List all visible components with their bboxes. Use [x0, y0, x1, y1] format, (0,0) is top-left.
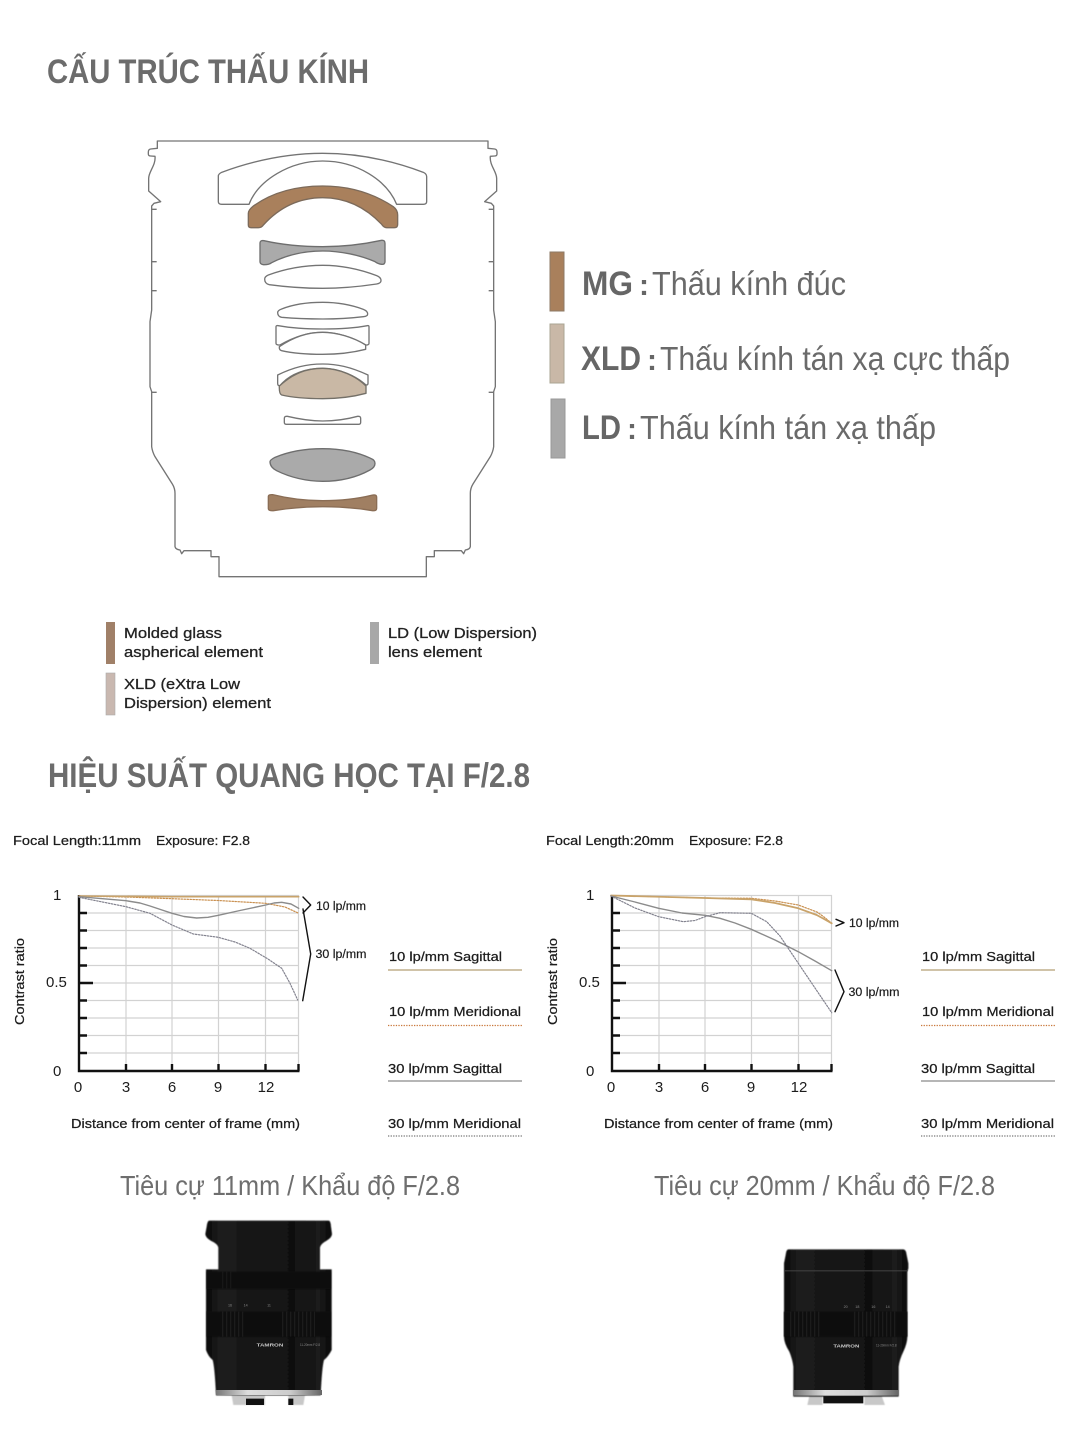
swatch LD element [370, 622, 379, 664]
zoom scale [844, 1305, 890, 1309]
chart spec line [546, 833, 783, 848]
key: 30 meridional [921, 1116, 1055, 1136]
label LD: Thấu kính tán xạ thấp [640, 409, 936, 446]
brace: 30 lp/mm [303, 909, 366, 1001]
mount [232, 1395, 305, 1405]
axes and ticks [79, 895, 300, 1071]
front ring highlight [785, 1270, 908, 1271]
key: 10 sagittal: 10 lp/mm Sagittal [389, 949, 502, 964]
curve: 10 lp/mm meridional [79, 896, 299, 913]
x axis values: 6 [701, 1079, 709, 1096]
x axis values: 9 [747, 1079, 755, 1096]
heading: optical performance: HIỆU SUẤT QUANG HỌC TẠI F/2.8 [48, 757, 530, 795]
label LD element: lens element [388, 644, 483, 661]
silver bayonet ring [794, 1390, 898, 1396]
key: 10 sagittal: 10 lp/mm Sagittal [922, 949, 1035, 964]
grid [612, 895, 832, 1070]
x axis values: 12 [791, 1079, 807, 1096]
front barrel and body [205, 1221, 332, 1395]
curve: 30 lp/mm sagittal [611, 896, 832, 971]
lens photo: retracted at 20mm [784, 1249, 908, 1405]
grid [79, 895, 299, 1070]
key: 30 meridional: 30 lp/mm Meridional [921, 1116, 1054, 1131]
lens element 10 [284, 416, 361, 424]
brace: 30 lp/mm: 30 lp/mm [848, 987, 900, 999]
zoom scale: 11 [267, 1304, 271, 1308]
curve: 30 lp/mm meridional [79, 897, 298, 1000]
brand text: TAMRON [257, 1342, 284, 1348]
y axis values: 0.5 [46, 974, 67, 991]
swatch MG [550, 252, 564, 311]
body [784, 1249, 908, 1397]
key: 10 sagittal [921, 949, 1055, 970]
y axis values: 0.5 [579, 974, 600, 991]
label LD element [388, 625, 537, 661]
lens element 11: LD [270, 449, 375, 481]
x axis values [607, 1079, 807, 1096]
chart spec line [13, 833, 250, 848]
x axis values: 3 [122, 1079, 130, 1096]
label MG: Thấu kính đúc [652, 265, 846, 302]
x axis values: 0 [74, 1079, 82, 1096]
lens element 4 [265, 265, 381, 288]
mount [807, 1396, 885, 1405]
swatch molded glass [106, 622, 115, 664]
label MG: MG [582, 265, 633, 303]
label LD element: LD (Low Dispersion) [388, 625, 537, 642]
x axis values: 12 [258, 1079, 274, 1096]
lens element 12: molded glass [268, 495, 377, 511]
key: 10 meridional [388, 1004, 522, 1026]
grip rings [207, 1272, 331, 1289]
label MG: : [639, 269, 649, 302]
lens element 1 [218, 153, 427, 204]
x axis values: 9 [214, 1079, 222, 1096]
silver bayonet ring [216, 1390, 322, 1395]
zoom scale: 16 [871, 1305, 875, 1309]
key: 30 meridional [388, 1116, 522, 1136]
key: 10 meridional: 10 lp/mm Meridional [922, 1004, 1054, 1019]
label XLD: XLD [581, 340, 641, 378]
lens element 3: LD [260, 240, 385, 265]
caption: 20mm: Tiêu cự 20mm / Khẩu độ F/2.8 [654, 1170, 995, 1201]
key: 10 sagittal [388, 949, 522, 970]
barrel outline [148, 141, 497, 577]
line key [921, 949, 1055, 1136]
key: 10 meridional: 10 lp/mm Meridional [389, 1004, 521, 1019]
legend: Vietnamese lens types [550, 252, 1010, 458]
key: 30 meridional: 30 lp/mm Meridional [388, 1116, 521, 1131]
y axis values: 1 [53, 887, 61, 904]
zoom scale: 18 [855, 1305, 859, 1309]
brace: 10 lp/mm: 10 lp/mm [316, 901, 366, 913]
y axis values: 1 [586, 887, 594, 904]
swatch XLD [550, 324, 564, 383]
axes and ticks [612, 895, 832, 1071]
brace: 10 lp/mm [303, 897, 366, 913]
label LD: : [627, 413, 637, 446]
line key [388, 949, 522, 1136]
chart spec line: Focal Length:11mm [13, 833, 141, 848]
y axis values [579, 887, 600, 1080]
x axis title: Distance from center of frame (mm) [604, 1116, 833, 1131]
curve: 30 lp/mm sagittal [79, 897, 299, 918]
brand text: TAMRON [833, 1343, 860, 1349]
lens element 6 [276, 326, 369, 345]
zoom scale: 16 [228, 1304, 232, 1308]
lens construction diagram [148, 141, 497, 577]
MTF chart panel: 20mm [545, 833, 1055, 1136]
x axis values: 3 [655, 1079, 663, 1096]
key: 30 sagittal [388, 1061, 522, 1081]
x axis title: Distance from center of frame (mm) [71, 1116, 300, 1131]
label XLD element: Dispersion) element [124, 695, 272, 712]
lens element 8 [278, 364, 368, 386]
label XLD: Thấu kính tán xạ cực thấp [660, 340, 1010, 377]
y axis values: 0 [53, 1063, 61, 1080]
lens element 7 [279, 332, 366, 354]
key: 30 sagittal: 30 lp/mm Sagittal [921, 1061, 1035, 1076]
brace: 30 lp/mm: 30 lp/mm [316, 949, 366, 961]
grip ring [784, 1312, 907, 1337]
brace: 10 lp/mm: 10 lp/mm [849, 918, 899, 930]
lens element 2: molded glass [248, 186, 398, 228]
lens element 5 [278, 302, 368, 319]
zoom scale: 14 [886, 1305, 890, 1309]
curve: 30 lp/mm meridional [611, 896, 832, 1013]
key: 30 sagittal [921, 1061, 1055, 1081]
MTF chart panel: 11mm [12, 833, 522, 1136]
zoom scale: 20 [844, 1305, 848, 1309]
model text: 11-20mm F/2.8 [876, 1344, 897, 1348]
y axis title: Contrast ratio [545, 938, 560, 1025]
x axis values [74, 1079, 274, 1096]
lens element 9: XLD [279, 368, 366, 399]
chart spec line: Exposure: F2.8 [156, 833, 250, 848]
zoom scale [228, 1304, 271, 1308]
y axis values: 0 [586, 1063, 594, 1080]
label MG [582, 265, 846, 303]
label XLD element [124, 676, 272, 712]
key: 30 sagittal: 30 lp/mm Sagittal [388, 1061, 502, 1076]
curve: 10 lp/mm sagittal [79, 895, 299, 898]
chart spec line: Focal Length:20mm [546, 833, 674, 848]
label LD: LD [582, 409, 621, 447]
y axis values [46, 887, 67, 1080]
swatch XLD element [106, 673, 115, 715]
model text: 11-20mm F/2.8 [300, 1343, 320, 1347]
label XLD element: XLD (eXtra Low [124, 676, 240, 693]
lens photo: extended at 11mm [205, 1221, 332, 1405]
heading: lens construction: CẤU TRÚC THẤU KÍNH [47, 53, 369, 91]
label molded glass: Molded glass [124, 625, 222, 642]
brace: 30 lp/mm [835, 970, 900, 1012]
curve: 10 lp/mm sagittal [611, 896, 832, 923]
chart spec line: Exposure: F2.8 [689, 833, 783, 848]
label molded glass [124, 625, 264, 661]
zoom scale: 14 [244, 1304, 248, 1308]
key: 10 meridional [921, 1004, 1055, 1026]
caption: 11mm: Tiêu cự 11mm / Khẩu độ F/2.8 [120, 1170, 460, 1201]
swatch LD [551, 399, 565, 458]
x axis values: 6 [168, 1079, 176, 1096]
y axis title: Contrast ratio [12, 938, 27, 1025]
curve: 10 lp/mm meridional [611, 896, 832, 923]
legend: English lens types [106, 622, 537, 715]
x axis values: 0 [607, 1079, 615, 1096]
label XLD: : [647, 344, 657, 377]
label molded glass: aspherical element [124, 644, 264, 661]
